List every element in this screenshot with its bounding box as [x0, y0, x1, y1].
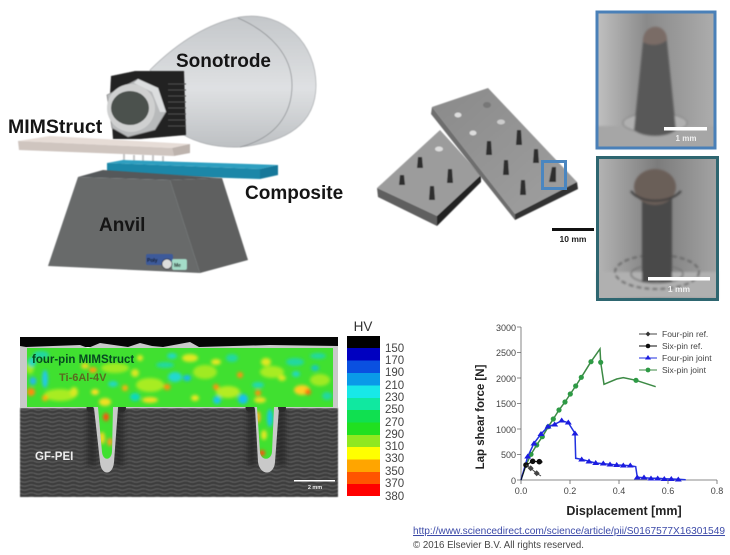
scale bar: 1 mm: 1 mm	[668, 284, 691, 294]
colour scale labels: 190	[385, 367, 404, 379]
icon: Poly-Me logo: Poly	[147, 258, 158, 264]
colour scale labels: 270	[385, 417, 404, 429]
y tick labels: 3000	[496, 323, 516, 333]
label: Composite: Composite	[245, 183, 343, 204]
right plate	[431, 88, 578, 220]
colour scale labels: 290	[385, 429, 404, 441]
copyright: © 2016 Elsevier B.V. All rights reserved.	[413, 540, 584, 551]
y tick labels: 1000	[496, 425, 516, 435]
colour scale labels: 350	[385, 466, 404, 478]
legend: Four-pin joint	[662, 353, 712, 363]
y tick labels	[496, 323, 516, 486]
heading: HV: HV	[354, 319, 372, 334]
source link: http://www.sciencedirect.com/science/article/pii/S0167577X16301549	[413, 526, 725, 537]
axes	[517, 327, 717, 484]
colour scale: HV	[347, 319, 404, 503]
x tick labels: 0.2	[564, 486, 576, 496]
hardness map: cross-section	[20, 337, 340, 497]
MIMStruct plate	[18, 136, 190, 164]
photo: MIMStruct plates with pins	[377, 88, 594, 244]
label: Anvil: Anvil	[99, 215, 145, 236]
colour scale labels: 370	[385, 478, 404, 490]
colour scale labels: 330	[385, 453, 404, 465]
y tick labels: 1500	[496, 399, 516, 409]
legend: Six-pin joint	[662, 365, 707, 375]
diagram: ultrasonic joining setup	[8, 16, 343, 273]
metal outline	[20, 342, 338, 472]
icon: Poly-Me logo	[146, 254, 187, 270]
series: six-pin joint	[521, 349, 656, 480]
series: six-pin ref.	[521, 459, 543, 480]
scale bar: 1 mm	[648, 277, 710, 294]
y tick labels: 500	[501, 450, 516, 460]
y tick labels: 2500	[496, 348, 516, 358]
colour scale labels: 250	[385, 404, 404, 416]
legend: Four-pin ref.	[662, 329, 708, 339]
scale bar: 2 mm	[294, 480, 335, 491]
left plate	[377, 130, 481, 226]
line chart: lap shear force vs displacement	[475, 323, 723, 518]
broad lime patches	[44, 389, 76, 401]
icon: Poly-Me logo: Me	[174, 263, 181, 269]
label: four-pin MIMStruct: four-pin MIMStruct	[32, 354, 134, 366]
colour scale labels: 210	[385, 380, 404, 392]
scale bar: 10 mm	[552, 228, 594, 244]
y tick labels: 0	[511, 476, 516, 486]
black top band	[20, 337, 338, 347]
heat blobs	[27, 348, 333, 459]
colour scale labels: 170	[385, 355, 404, 367]
dark halo around pins	[87, 408, 286, 466]
colour scale labels: 310	[385, 441, 404, 453]
highlight box	[542, 162, 566, 188]
micrograph: pin after joining	[597, 157, 718, 300]
y tick labels: 2000	[496, 374, 516, 384]
colour bar	[347, 336, 380, 496]
clamp block with nut	[107, 71, 186, 139]
x tick labels	[515, 486, 723, 496]
legend: Six-pin ref.	[662, 341, 703, 351]
x tick labels: 0.6	[662, 486, 674, 496]
sonotrode horn	[150, 16, 316, 147]
scale bar: 1 mm: 1 mm	[676, 134, 696, 143]
scale bar: 2 mm: 2 mm	[308, 485, 322, 491]
label: Sonotrode: Sonotrode	[176, 51, 271, 72]
series: four-pin ref.	[526, 465, 541, 476]
label: Ti-6Al-4V: Ti-6Al-4V	[59, 372, 107, 384]
micrograph: pin before joining	[597, 12, 715, 148]
anvil	[48, 170, 248, 273]
colour scale labels: 380	[385, 491, 404, 503]
composite plate	[107, 160, 278, 179]
colour scale labels	[385, 343, 404, 503]
pin shoulders	[86, 404, 286, 412]
composite GF-PEI	[20, 408, 338, 497]
colour scale labels: 230	[385, 392, 404, 404]
x tick labels: 0.4	[613, 486, 625, 496]
colour scale labels: 150	[385, 343, 404, 355]
x tick labels: 0.0	[515, 486, 527, 496]
label: MIMStruct: MIMStruct	[8, 116, 103, 138]
label: GF-PEI: GF-PEI	[35, 451, 73, 463]
y axis title: Lap shear force [N]	[475, 364, 487, 469]
x axis title: Displacement [mm]	[566, 504, 682, 518]
legend	[639, 329, 712, 375]
series: four-pin joint	[521, 418, 686, 482]
scale bar: 10 mm: 10 mm	[560, 234, 587, 244]
x tick labels: 0.8	[711, 486, 723, 496]
